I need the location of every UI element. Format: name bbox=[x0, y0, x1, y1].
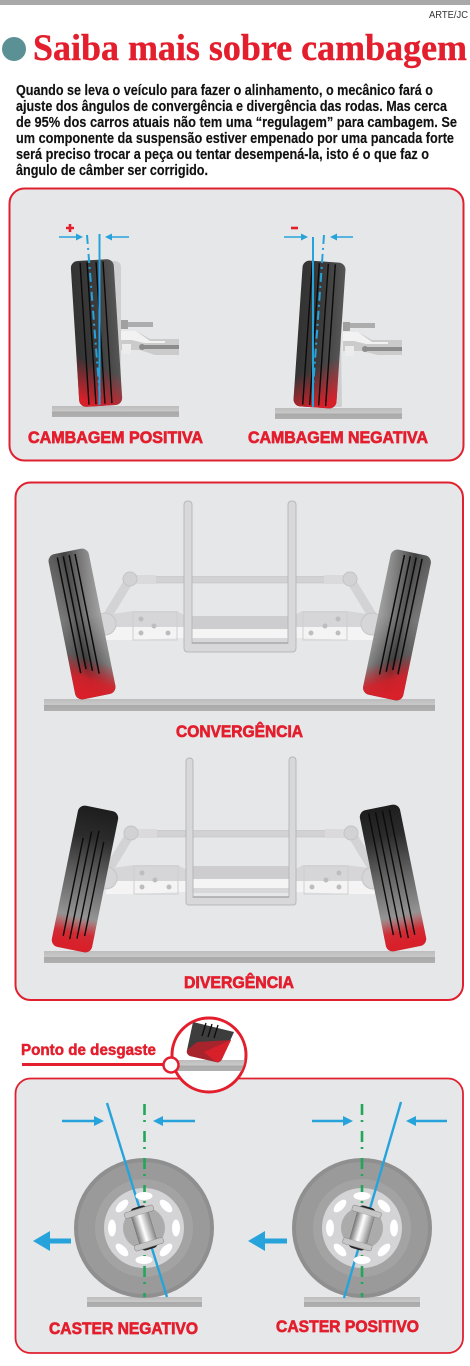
panel: cambagem bbox=[10, 188, 464, 460]
diagram: divergência bbox=[44, 757, 435, 963]
intro text bbox=[16, 83, 457, 179]
label: caster positivo: CASTER POSITIVO bbox=[276, 1317, 419, 1336]
label: caster negativo: CASTER NEGATIVO bbox=[49, 1319, 198, 1338]
diagram: cambagem negativa bbox=[275, 228, 402, 419]
diagram: caster positivo bbox=[248, 1102, 447, 1307]
label: cambagem positiva: CAMBAGEM POSITIVA bbox=[28, 428, 203, 447]
panel: convergência e divergência bbox=[16, 482, 463, 1000]
title: Saiba mais sobre cambagem bbox=[33, 28, 467, 69]
diagram: caster negativo bbox=[33, 1103, 214, 1307]
label: divergência: DIVERGÊNCIA bbox=[184, 973, 294, 992]
intro text: ângulo de câmber ser corrigido. bbox=[16, 163, 208, 179]
diagram: convergência bbox=[44, 501, 435, 711]
diagram: cambagem positiva bbox=[52, 224, 179, 417]
top rule bbox=[0, 0, 470, 5]
icon: teal bullet bbox=[2, 37, 26, 61]
label: cambagem negativa: CAMBAGEM NEGATIVA bbox=[248, 428, 428, 447]
label: convergência: CONVERGÊNCIA bbox=[176, 722, 303, 741]
panel: caster bbox=[16, 1078, 463, 1353]
callout label: Ponto de desgaste bbox=[21, 1042, 156, 1059]
callout: ponto de desgaste bbox=[21, 1018, 250, 1092]
credit: ARTE/JC bbox=[429, 10, 468, 21]
